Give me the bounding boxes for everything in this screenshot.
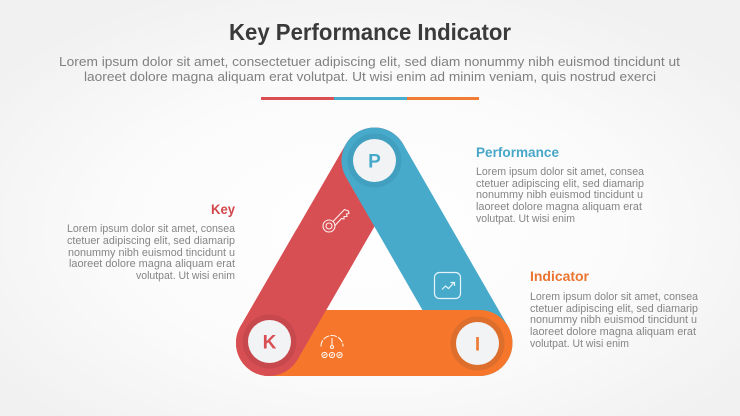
band: indicator (orange) [269, 310, 480, 376]
node: K [242, 314, 296, 368]
node: K: K [263, 332, 277, 354]
body: Indicator: volutpat. Ut wisi enim [530, 338, 629, 350]
text block: Performance [476, 144, 644, 225]
node: P: P [368, 152, 381, 172]
body: Key: nonummy nibh euismod tincidunt u [68, 247, 235, 259]
heading: Indicator: Indicator [530, 268, 590, 284]
title: Key Performance Indicator [229, 19, 511, 45]
body: Performance: ctetuer adipiscing elit, sed diamarip [476, 178, 644, 190]
text block: Key [67, 201, 235, 282]
node: I [450, 316, 504, 370]
node: I: I [475, 334, 480, 356]
tri-colour divider [261, 97, 479, 100]
body: Key: ctetuer adipiscing elit, sed diamarip [67, 235, 235, 247]
body: Indicator [530, 291, 698, 350]
body: Key: Lorem ipsum dolor sit amet, consea [67, 223, 235, 235]
icon: growth chart [434, 272, 460, 298]
red cap at K [236, 310, 302, 376]
band: key (red) [269, 160, 374, 343]
text block: Indicator [530, 268, 698, 350]
body: Performance: volutpat. Ut wisi enim [476, 213, 575, 225]
icon: key [323, 210, 349, 232]
heading: Performance: Performance [476, 144, 559, 160]
band overlap: red over orange [269, 246, 325, 343]
body: Performance: Lorem ipsum dolor sit amet, consea [476, 166, 644, 178]
triangle diagram [236, 134, 504, 376]
subtitle text: Lorem ipsum dolor sit amet, consectetuer adipiscing elit, sed diam nonummy nibh euismod tincidunt ut [59, 54, 680, 69]
subtitle text [59, 54, 680, 84]
body: Performance: laoreet dolore magna aliquam erat [476, 201, 642, 213]
body: Indicator: laoreet dolore magna aliquam erat [530, 326, 696, 338]
body: Key [67, 223, 235, 282]
body: Indicator: Lorem ipsum dolor sit amet, consea [530, 291, 698, 303]
body: Performance: nonummy nibh euismod tincidunt u [476, 189, 643, 201]
icon: gauge [321, 336, 343, 358]
body: Key: volutpat. Ut wisi enim [136, 270, 235, 282]
body: Indicator: ctetuer adipiscing elit, sed diamarip [530, 303, 698, 315]
body: Indicator: nonummy nibh euismod tincidunt u [530, 314, 697, 326]
body: Key: laoreet dolore magna aliquam erat [69, 258, 235, 270]
heading: Key: Key [211, 201, 235, 217]
subtitle text: laoreet dolore magna aliquam erat volutpat. Ut wisi enim ad minim veniam, quis nostrud exerci [84, 69, 656, 84]
body: Performance [476, 166, 644, 225]
band: performance (blue) [374, 160, 480, 343]
node: P [348, 134, 402, 188]
